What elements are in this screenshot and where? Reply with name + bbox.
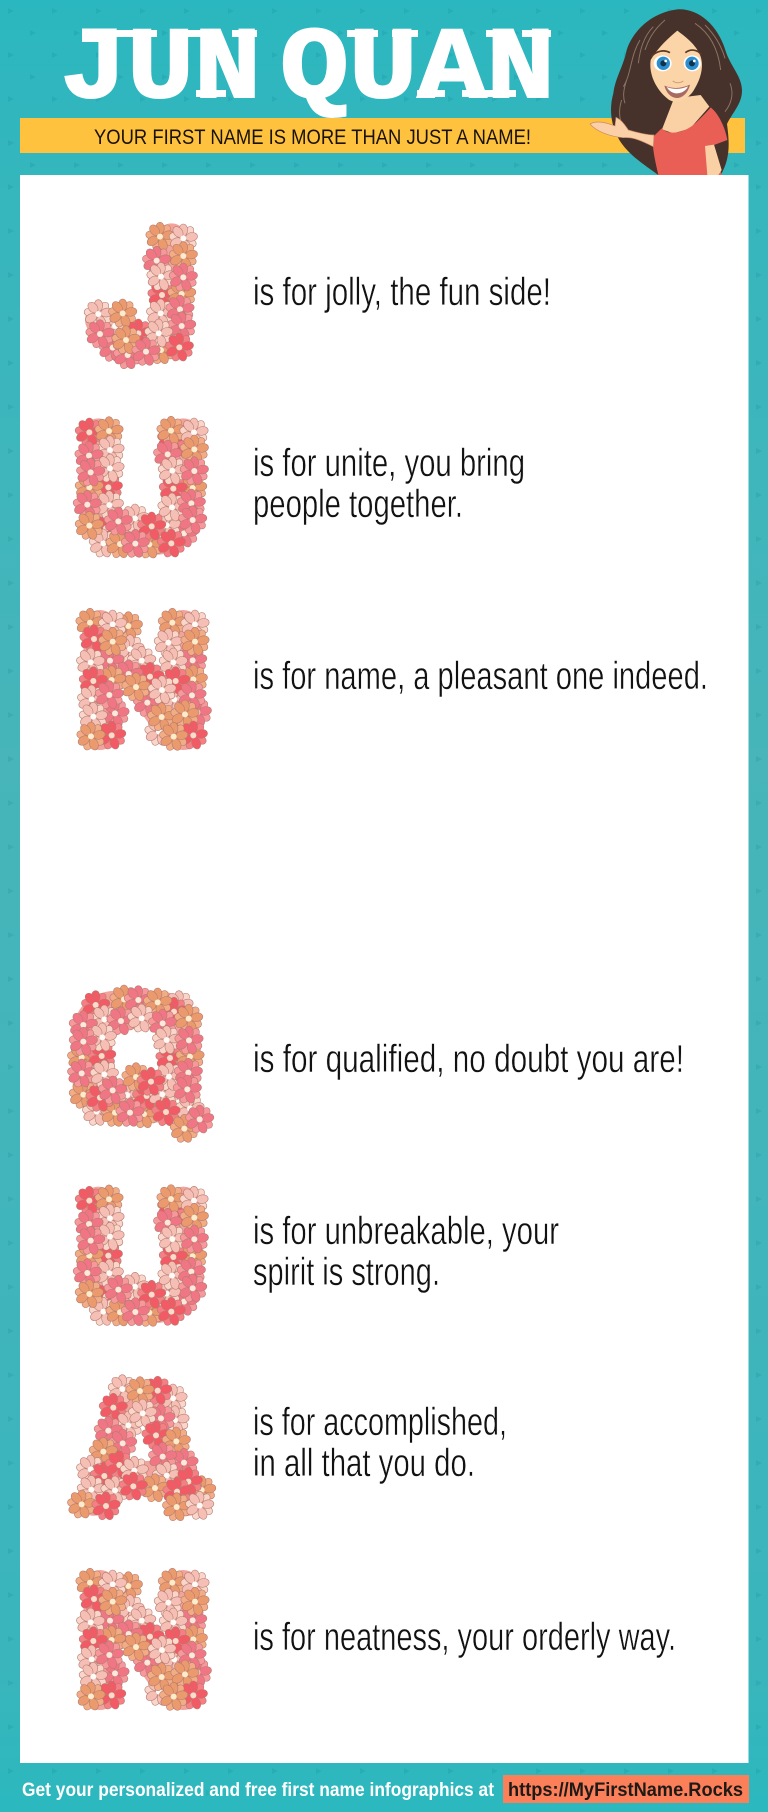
text: second U lines bbox=[253, 1210, 559, 1294]
banner bbox=[20, 118, 745, 153]
text: A lines bbox=[253, 1401, 507, 1485]
row: A bbox=[67, 1375, 507, 1522]
icon: floral letter U bbox=[72, 416, 209, 559]
text: A lines: is for accomplished, bbox=[253, 1401, 507, 1444]
text: U lines: is for unite, you bring bbox=[253, 442, 525, 485]
row: U bbox=[72, 416, 525, 559]
icon: floral letter J bbox=[83, 222, 198, 370]
text: second U lines: spirit is strong. bbox=[253, 1251, 440, 1294]
text: U lines bbox=[253, 442, 525, 526]
footer bbox=[22, 1775, 749, 1803]
icon: floral letter N, second bbox=[75, 1568, 212, 1712]
text: U lines: people together. bbox=[253, 483, 463, 526]
row: second N bbox=[75, 1568, 676, 1712]
row: J bbox=[83, 222, 551, 370]
title bbox=[60, 12, 555, 128]
text: A lines: in all that you do. bbox=[253, 1442, 475, 1485]
title: JUN bbox=[60, 12, 261, 128]
icon: floral letter A bbox=[67, 1375, 217, 1522]
footer link pill: https://MyFirstName.Rocks bbox=[508, 1780, 743, 1801]
row: Q bbox=[67, 985, 684, 1144]
text: second U lines: is for unbreakable, your bbox=[253, 1210, 559, 1253]
row: N bbox=[75, 608, 708, 752]
row: second U bbox=[72, 1185, 559, 1328]
illustration: woman presenting bbox=[590, 9, 742, 175]
title: QUAN bbox=[280, 12, 555, 128]
footer text: Get your personalized and free first name infographics at bbox=[22, 1780, 495, 1801]
text: J line: is for jolly, the fun side! bbox=[253, 271, 551, 314]
icon: floral letter Q bbox=[67, 985, 215, 1144]
banner text: YOUR FIRST NAME IS MORE THAN JUST A NAME! bbox=[94, 125, 531, 149]
icon: floral letter N bbox=[75, 608, 212, 752]
icon: floral letter U, second bbox=[72, 1185, 209, 1328]
